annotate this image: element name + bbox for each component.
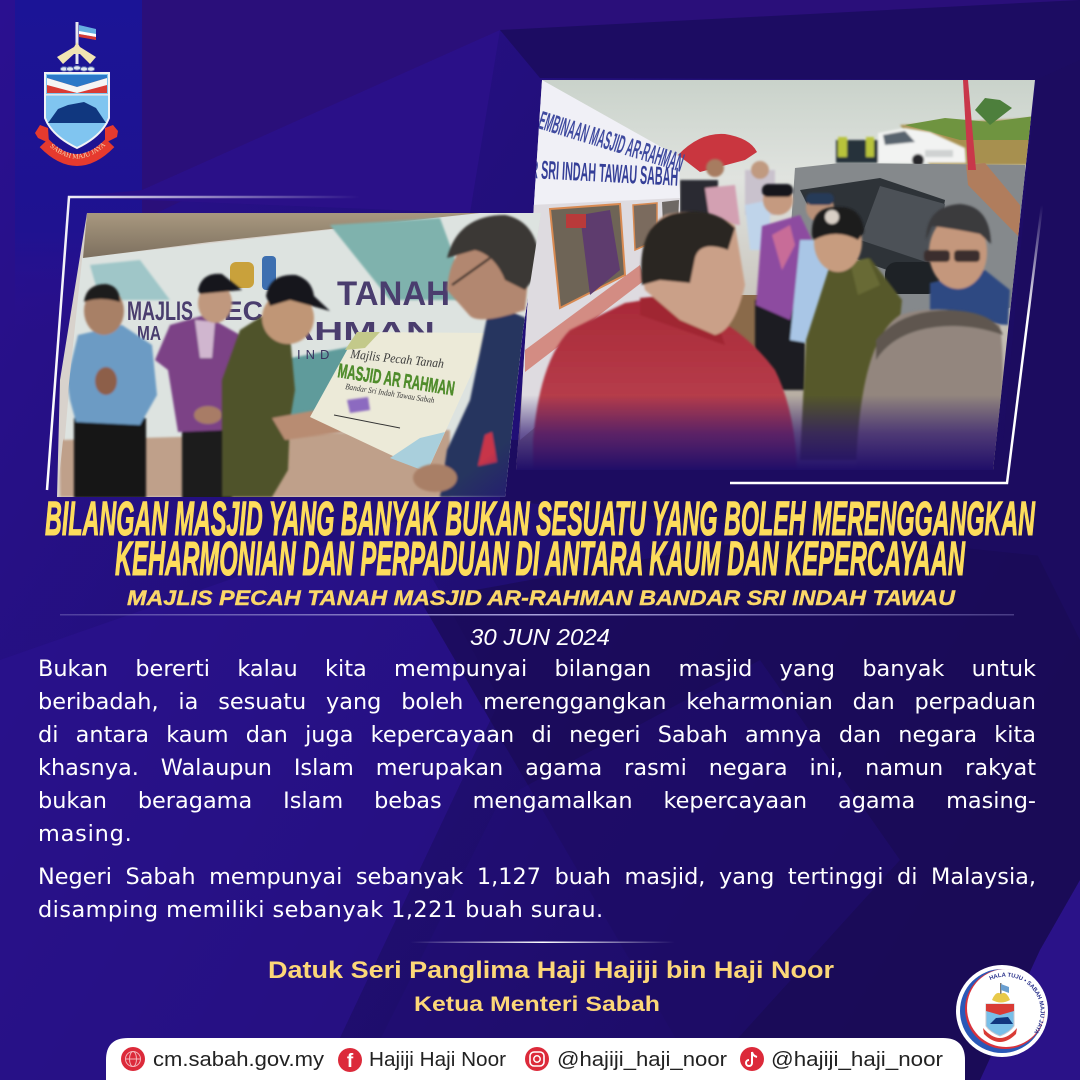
tiktok handle: @hajiji_haji_noor <box>771 1048 943 1071</box>
photo: plaque signing ceremony: AHMAN <box>285 316 435 346</box>
arm and red pole <box>966 163 1020 238</box>
body text: first paragraph: Bukan bererti kalau kita mempunyai bilangan masjid yang banyak untuk <box>38 656 1036 682</box>
icon: facebook <box>338 1048 362 1072</box>
glasses man <box>924 204 1010 325</box>
instagram handle: @hajiji_haji_noor <box>557 1048 727 1071</box>
date: 30 JUN 2024 <box>470 624 610 650</box>
man in blue shirt <box>67 284 157 498</box>
photo: site visit at mosque plan board: EMBINAAN MASJID AR-RAHMAN <box>535 105 687 178</box>
crests <box>230 262 254 288</box>
photo: plaque signing ceremony: PEC <box>205 296 263 326</box>
blue shirt man <box>790 240 835 345</box>
badge: Hala Tuju Sabah Maju Jaya <box>956 965 1048 1057</box>
social media bar <box>106 1038 965 1080</box>
plaque: Majlis Pecah Tanah <box>349 346 445 371</box>
website address: cm.sabah.gov.my <box>153 1048 325 1071</box>
speaker role: Ketua Menteri Sabah <box>414 992 660 1016</box>
frame line: ceremony photo <box>47 197 360 490</box>
police car <box>836 128 966 166</box>
hillside <box>900 118 1035 165</box>
man in olive shirt signing <box>220 273 344 497</box>
icon: website globe <box>121 1047 145 1071</box>
speaker name: Datuk Seri Panglima Haji Hajiji bin Haji Noor <box>268 957 834 984</box>
man in purple batik <box>155 274 242 500</box>
badge: Hala Tuju Sabah Maju Jaya: HALA TUJU • SABAH MAJU JAYA <box>989 972 1045 1034</box>
photo: plaque signing ceremony: MA <box>137 323 161 345</box>
olive man <box>800 207 902 460</box>
icon: tiktok <box>740 1047 764 1071</box>
emblem: Sabah coat of arms: SABAH MAJU JAYA <box>50 143 106 159</box>
icon: instagram <box>525 1047 549 1071</box>
photo frame backing <box>57 213 541 497</box>
photo: site visit at mosque plan board: R SRI INDAH TAWAU SABAH <box>530 154 679 192</box>
photo: site visit at mosque plan board <box>510 78 1040 478</box>
icon: facebook: f <box>347 1051 354 1072</box>
frame line: site photo <box>730 205 1042 483</box>
plaque: Bandar Sri Indah Tawau Sabah <box>345 381 435 405</box>
body text: first paragraph: bukan beragama Islam bebas mengamalkan kepercayaan agama masing- <box>38 788 1036 814</box>
crowd behind <box>680 159 775 250</box>
purple batik man <box>755 184 835 390</box>
subtitle: MAJLIS PECAH TANAH MASJID AR-RAHMAN BANDAR SRI INDAH TAWAU <box>127 587 956 610</box>
man in navy shirt <box>413 215 540 497</box>
signboard <box>526 80 680 207</box>
red umbrella <box>678 134 757 172</box>
title <box>45 493 1036 586</box>
body text: first paragraph: khasnya. Walaupun Islam merupakan agama rasmi negara ini, namun rakyat <box>38 755 1036 781</box>
body text: second paragraph <box>38 864 1036 923</box>
facebook name: Hajiji Haji Noor <box>369 1048 506 1071</box>
grey car <box>790 163 1025 320</box>
bottom fade <box>516 398 1000 470</box>
body text: first paragraph: di antara kaum dan juga kepercayaan di negeri Sabah amnya dan negara kita <box>38 722 1036 748</box>
photo: plaque signing ceremony: IND <box>297 347 334 362</box>
body text: second paragraph: disamping memiliki sebanyak 1,221 buah surau. <box>38 897 604 923</box>
body text: second paragraph: Negeri Sabah mempunyai sebanyak 1,127 buah masjid, yang tertinggi di Malaysia, <box>38 864 1036 890</box>
body text: first paragraph: beribadah, ia sesuatu yang boleh merenggangkan keharmonian dan perpaduan <box>38 689 1036 715</box>
banner <box>60 213 545 497</box>
man in red shirt <box>533 211 797 470</box>
grey-haired head <box>856 309 1003 470</box>
photo: plaque signing ceremony: TANAH <box>337 275 450 313</box>
body text: first paragraph <box>38 656 1036 847</box>
plaque <box>310 332 490 472</box>
photo: plaque signing ceremony: MAJLIS <box>127 296 193 326</box>
photo: plaque signing ceremony <box>60 213 545 500</box>
plaque: MASJID AR RAHMAN <box>336 360 456 400</box>
body text: first paragraph: masing. <box>38 821 133 847</box>
emblem: Sabah coat of arms <box>35 22 118 166</box>
